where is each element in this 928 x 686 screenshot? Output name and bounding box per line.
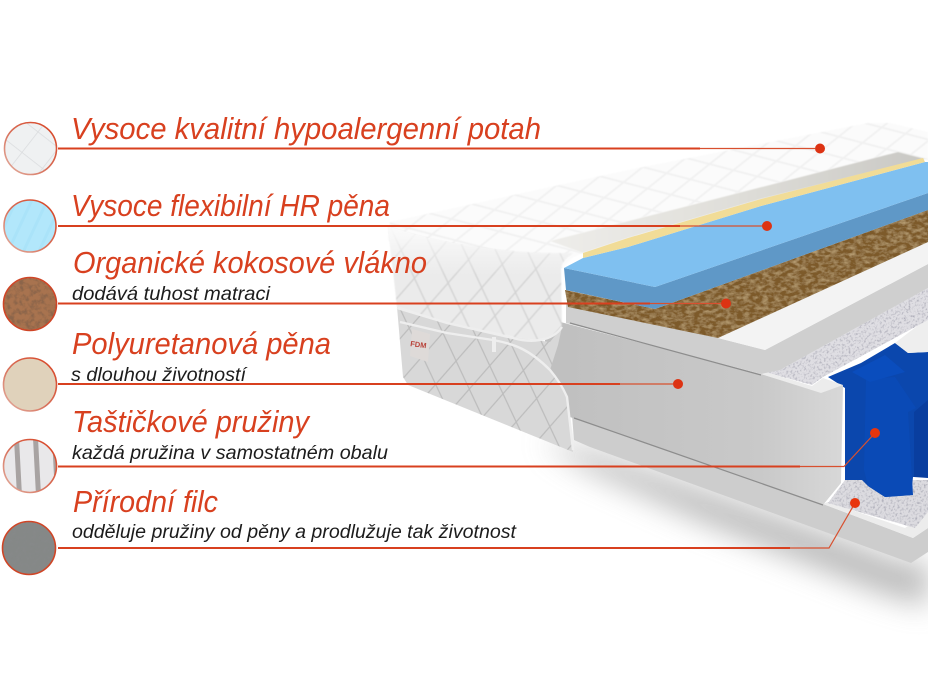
heading: felt: Přírodní filc <box>73 484 218 519</box>
swatch ring: felt <box>2 522 56 574</box>
yellow layer <box>583 158 925 258</box>
swatch ring: coconut <box>4 278 56 330</box>
heading: springs: Taštičkové pružiny <box>72 404 311 439</box>
panel top light edge <box>761 372 843 393</box>
subtitle: felt: odděluje pružiny od pěny a prodlužuje tak životnost <box>72 521 518 543</box>
leader line: coconut <box>58 298 731 308</box>
layer 2: flexible foam <box>4 188 772 252</box>
sewn-in label <box>410 329 430 362</box>
leader line: springs <box>58 428 880 466</box>
quilted cover top <box>388 123 928 268</box>
upper felt layer <box>765 288 928 385</box>
pocket springs <box>828 343 928 497</box>
layer 6: natural felt <box>2 484 860 574</box>
coconut fibre layer <box>565 210 928 338</box>
base foam layer <box>572 415 928 563</box>
layer 5: pocket springs <box>4 404 880 492</box>
upper foam side band <box>566 264 928 374</box>
heading: polyurethane: Polyuretanová pěna <box>72 326 331 361</box>
layer 3: coconut fibre <box>4 245 731 330</box>
sewn-in label: FDM <box>410 339 427 350</box>
leader line: cover <box>58 144 825 154</box>
lower felt layer <box>828 480 928 528</box>
swatch: blue foam <box>4 200 56 252</box>
peeled cover underside fabric <box>550 152 925 253</box>
layer 1: cover <box>4 111 825 174</box>
swatch: coconut fibre <box>4 278 56 330</box>
quilted cover front <box>388 226 573 340</box>
swatch: quilted cover <box>4 122 56 174</box>
zip piping <box>397 308 573 450</box>
upper foam white top <box>718 242 928 350</box>
heading: coconut: Organické kokosové vlákno <box>73 245 427 280</box>
swatch: springs <box>4 440 56 492</box>
quilted cover flap <box>397 307 573 452</box>
foam side panel <box>545 318 843 505</box>
leader line: polyurethane <box>58 379 683 389</box>
leader line: foam <box>58 221 772 231</box>
drop shadow <box>540 440 928 606</box>
swatch: felt <box>3 522 55 574</box>
base foam top edge <box>823 502 928 538</box>
subtitle: polyurethane: s dlouhou životností <box>71 364 248 386</box>
heading: cover: Vysoce kvalitní hypoalergenní potah <box>71 111 541 146</box>
heading: foam: Vysoce flexibilní HR pěna <box>71 188 390 223</box>
subtitle: coconut: dodává tuhost matraci <box>72 283 271 305</box>
layer 4: polyurethane foam <box>4 326 683 411</box>
mattress cutaway illustration <box>388 123 928 606</box>
swatch: polyurethane <box>4 358 56 411</box>
leader line: felt <box>58 498 860 548</box>
blue foam side <box>564 193 928 309</box>
subtitle: springs: každá pružina v samostatném obalu <box>72 442 388 464</box>
blue foam top <box>564 162 928 287</box>
white spring cover behind <box>895 320 928 353</box>
